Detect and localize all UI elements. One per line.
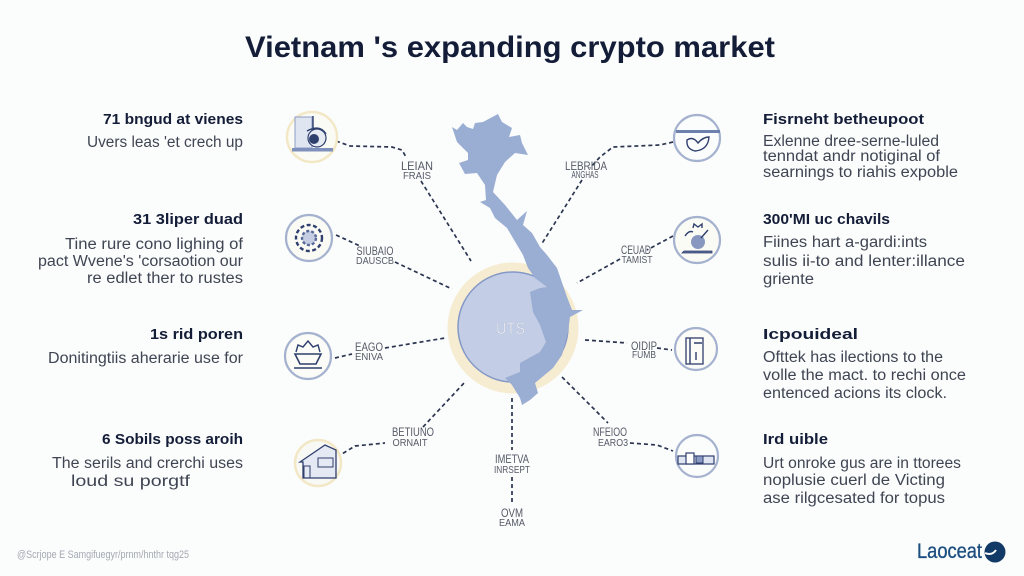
right block 3 (763, 326, 966, 402)
left block 2: pact Wvene's 'corsaotion our (38, 253, 243, 270)
left block 2: re edlet ther to rustes (87, 270, 243, 287)
left block 4: The serils and crerchi uses (52, 455, 243, 472)
central map with highlighted circle (448, 114, 583, 405)
connector labels: FRAIS (403, 171, 431, 182)
right block 1: Exlenne dree-serne-luled (763, 133, 939, 150)
right block 1 (763, 111, 958, 181)
connector labels: SIUBAIO (356, 244, 394, 258)
left block 4 (52, 431, 243, 490)
left block 2: 31 3liper duad (133, 211, 243, 228)
right block 3: volle the mact. to rechi once (763, 367, 966, 384)
left block 1 (87, 111, 243, 151)
connector lines (335, 141, 673, 505)
connector labels: TAMIST (622, 255, 652, 266)
icon: circular network (286, 215, 332, 261)
connector labels: OVM (501, 506, 523, 520)
logo: Laoceat (917, 540, 982, 563)
left block 1: 71 bngud at vienes (103, 111, 243, 128)
right block 2 (763, 211, 965, 288)
connector labels: EAMA (499, 518, 525, 529)
icon: door panel (675, 328, 717, 370)
right block 4: Ird uible (763, 431, 828, 448)
right block 1: searnings to riahis expoble (763, 164, 958, 181)
right block 4: Urt onroke gus are in ttorees (763, 455, 961, 472)
left block 3: Donitingtiis aherarie use for (48, 350, 243, 367)
right block 1: Fisrneht betheupoot (763, 111, 924, 128)
connector labels: CEUAD (621, 243, 651, 257)
connector labels: LEBRIDA (565, 159, 607, 173)
right block 2: griente (763, 271, 814, 288)
icon: lotus bowl (285, 333, 331, 379)
left block 3 (48, 326, 243, 367)
right block 4 (763, 431, 961, 507)
title: Vietnam 's expanding crypto market (245, 31, 775, 64)
connector labels: LEIAN (401, 159, 433, 173)
connector labels: ORNAIT (392, 438, 428, 449)
right block 3: Ofttek has ilections to the (763, 349, 943, 366)
right block 3: Icpouideal (763, 326, 858, 343)
connector labels (355, 159, 657, 529)
connector labels: ANGHAS (572, 170, 599, 181)
left block 4: 6 Sobils poss aroih (102, 431, 243, 448)
right block 2: sulis ii-to and lenter:illance (763, 253, 965, 270)
connector labels: NFEIOO (593, 425, 627, 439)
icon: bar over bird (674, 115, 720, 161)
connector labels: INRSEPT (494, 465, 530, 476)
right block 1: tenndat andr notiginal of (763, 148, 941, 165)
icon: low factory (676, 435, 718, 477)
connector labels: FUMB (632, 350, 656, 361)
left block 4: loud su porgtf (71, 473, 191, 490)
connector labels: ENIVA (355, 352, 383, 363)
footer source text: @Scrjope E Samgifuegyr/prnm/hnthr tqg25 (17, 549, 189, 561)
connector labels: DAUSCB (356, 256, 394, 267)
left block 3: 1s rid poren (150, 326, 243, 343)
left block 2: Tine rure cono lighing of (65, 236, 244, 253)
icon: bowl with crown (674, 217, 720, 263)
connector labels: BETIUNO (392, 425, 434, 439)
right block 2: 300'MI uc chavils (763, 211, 890, 228)
icon: building (295, 440, 341, 486)
left block 2 (38, 211, 244, 287)
icon: document and globe (287, 112, 337, 162)
connector labels: EARO3 (598, 438, 628, 449)
right block 3: entenced acions its clock. (763, 385, 947, 402)
left block 1: Uvers leas 'et crech up (87, 134, 243, 151)
connector labels: IMETVA (495, 452, 529, 466)
connector labels: OIDIP (631, 339, 657, 353)
connector labels: EAGO (355, 340, 383, 354)
right block 4: noplusie cuerl de Victing (763, 472, 945, 489)
central map with highlighted circle: UTS (496, 320, 525, 338)
right block 2: Fiines hart a-gardi:ints (763, 234, 927, 251)
right block 4: ase rilgcesated for topus (763, 490, 945, 507)
